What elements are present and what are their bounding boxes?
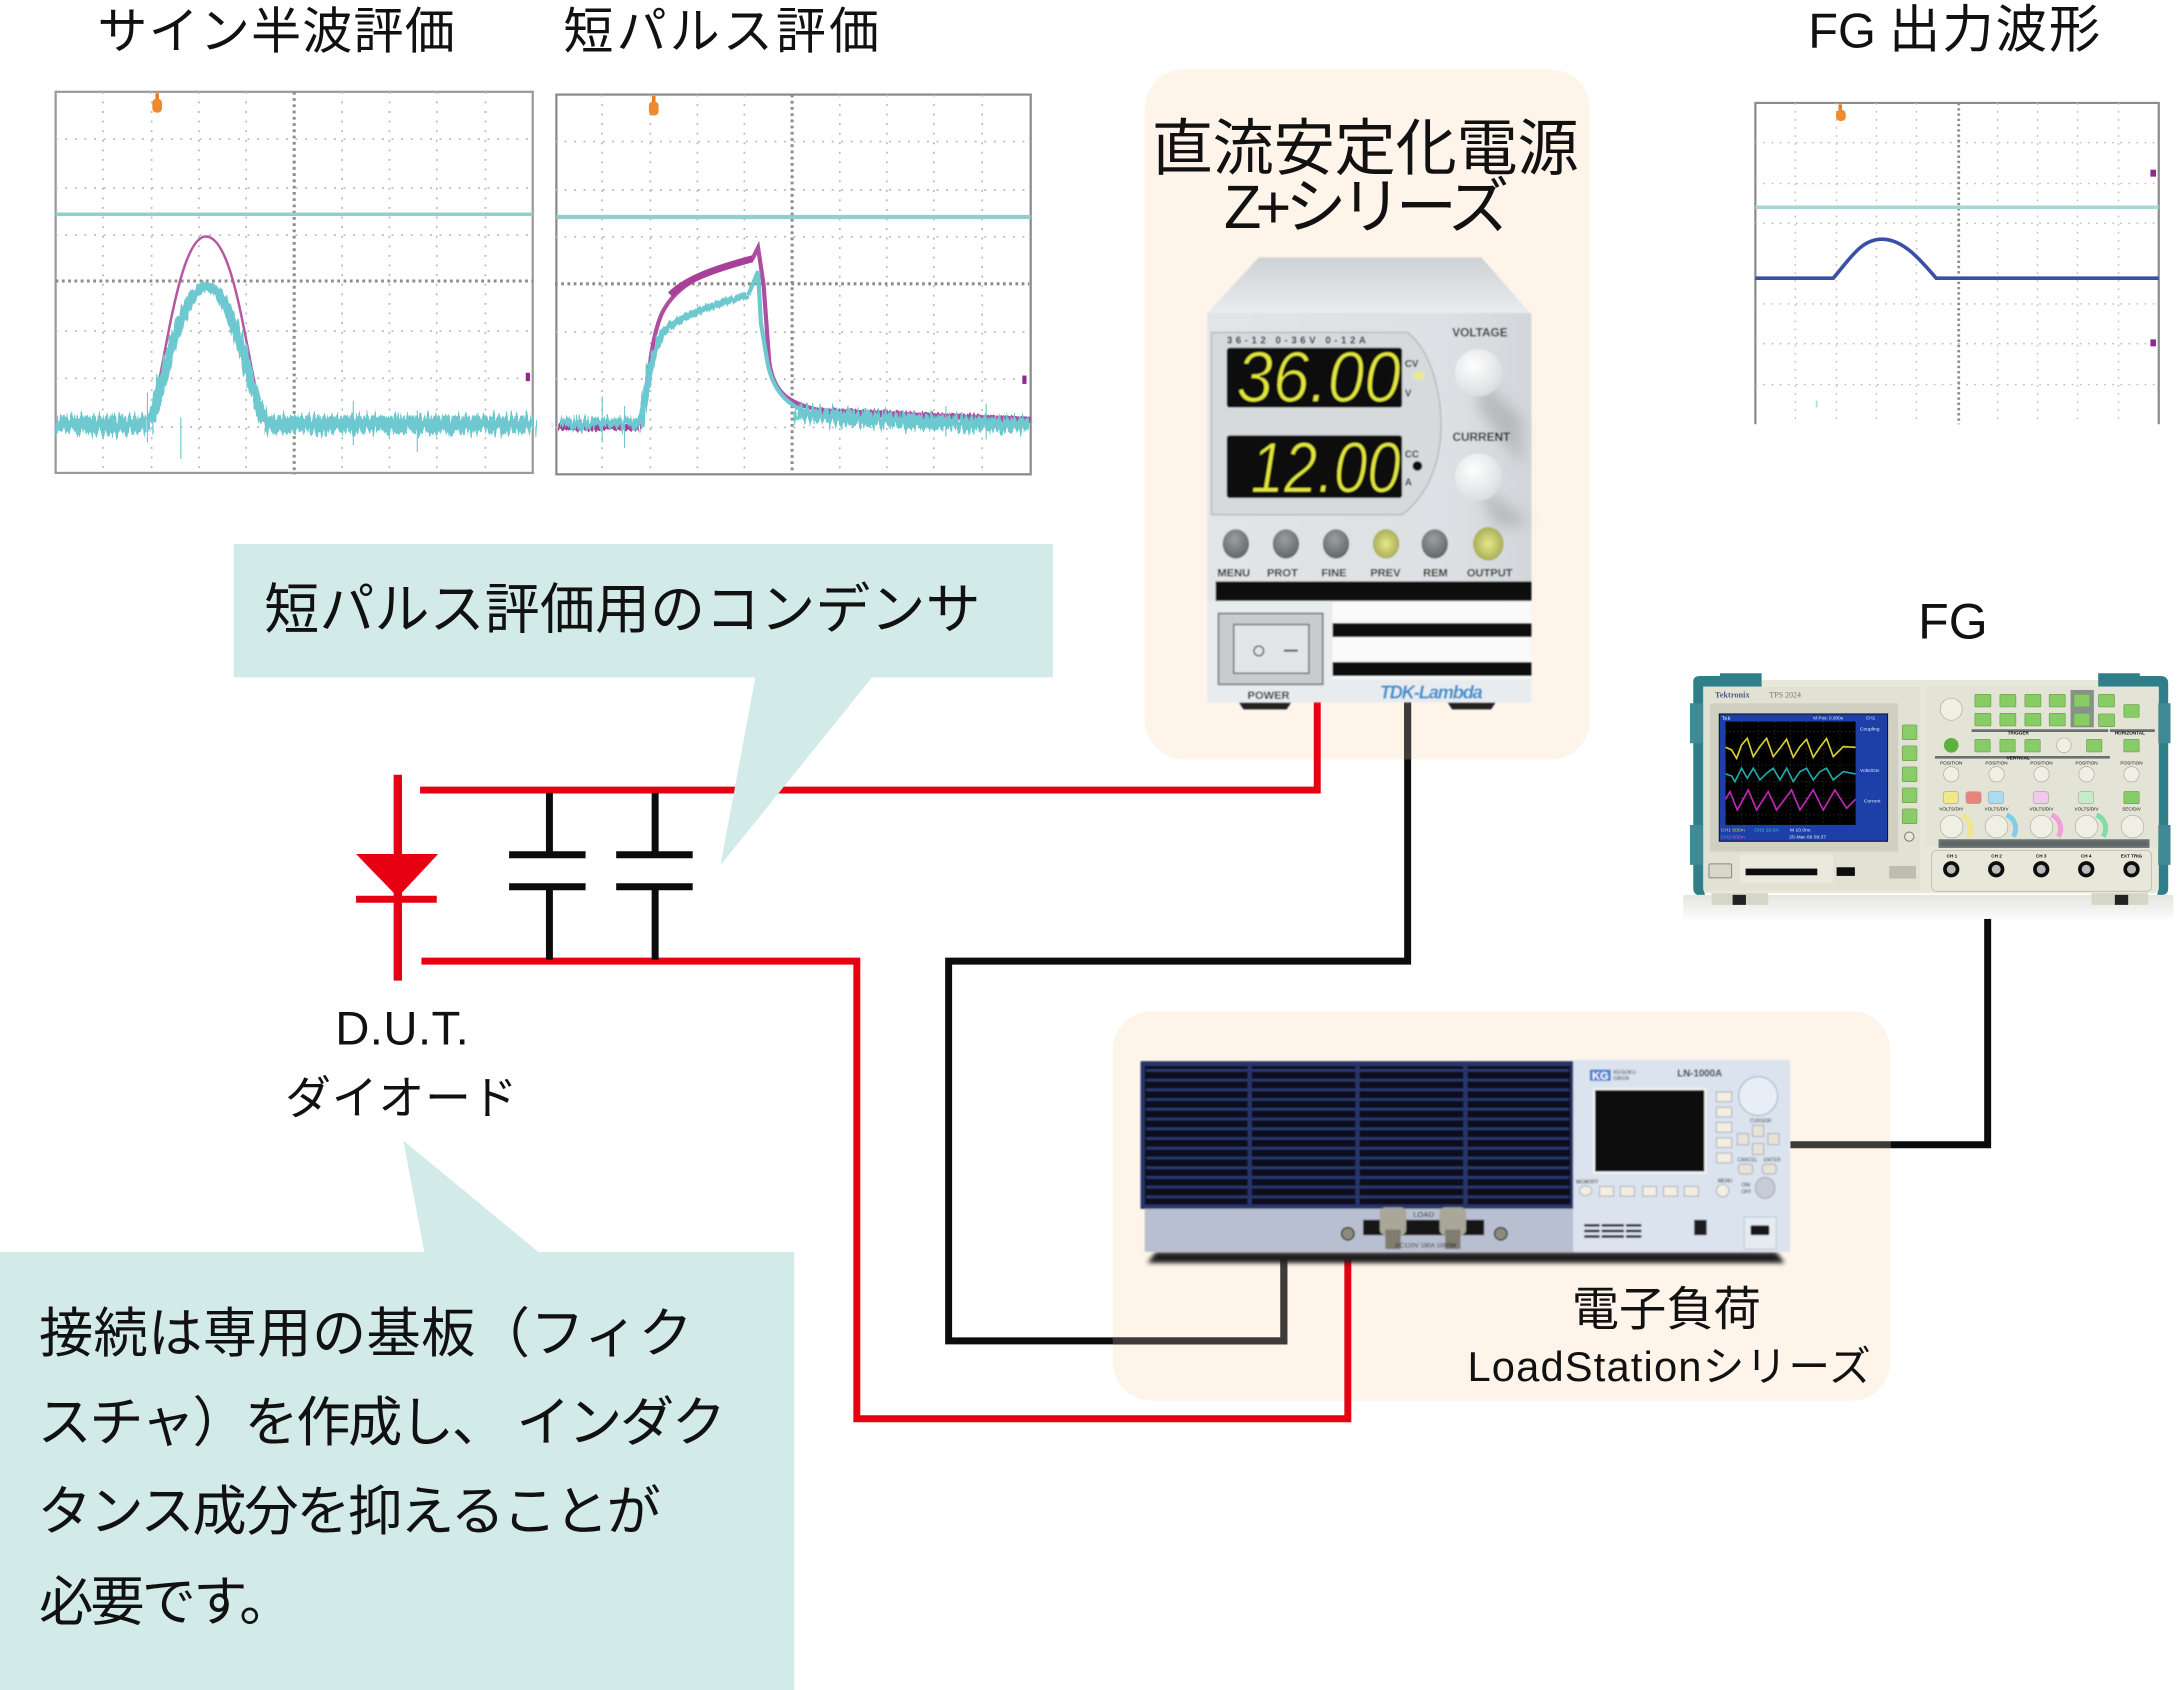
case (1697, 680, 2165, 893)
oscilloscope screen: M 10.0ns (1790, 827, 1811, 833)
front control panel (1573, 1060, 1790, 1252)
KG logo: KG (1592, 1070, 1609, 1082)
on off button (1755, 1177, 1775, 1198)
diagram: capacitor 2 (616, 793, 693, 960)
key labels: MENU (1718, 1178, 1733, 1184)
heading: FG output waveform: FG (1808, 4, 1876, 58)
diagram: capacitor 1 (509, 793, 586, 960)
POWER label: POWER (1248, 690, 1290, 702)
compact flash slot (1709, 855, 1916, 883)
position and volts labels: POSITION (2030, 761, 2053, 766)
heading: electronic load: 電子負荷 (1572, 1284, 1761, 1337)
position and volts labels: POSITION (2075, 761, 2098, 766)
label: diode: ダイオード (285, 1072, 517, 1124)
position and volts labels (1939, 761, 2143, 811)
menu check knob (1905, 832, 1914, 841)
help key group (2071, 690, 2094, 727)
button labels (1217, 568, 1513, 580)
power switch (1744, 1217, 1776, 1249)
power supply feet (1238, 701, 1497, 709)
vent stripes (1333, 602, 1531, 679)
connector labels: EXT TRIG (2121, 854, 2143, 859)
channel buttons (1943, 792, 2094, 804)
key labels (1576, 1118, 1781, 1195)
position and volts labels: POSITION (2120, 761, 2143, 766)
oscilloscope screen: CH1 500m (1721, 827, 1745, 833)
CV and CC indicators: V (1405, 388, 1412, 399)
panel: power supply background (1145, 70, 1590, 759)
voltage knob: VOLTAGE (1452, 326, 1508, 340)
KG logo: KEISOKU (1613, 1070, 1636, 1076)
device: DC power supply Z+ (1207, 257, 1531, 709)
section labels (2007, 730, 2145, 760)
power supply front face (1207, 313, 1531, 702)
section labels: HORIZONTAL (2115, 730, 2145, 735)
load terminals: LOAD (1413, 1210, 1434, 1219)
softkeys (1902, 725, 1917, 824)
key labels: OFF (1741, 1189, 1751, 1195)
oscilloscope screen: M Pos: 0.000s (1813, 715, 1844, 720)
brand: TPS 2024 (1769, 690, 1801, 699)
button labels: PREV (1370, 568, 1401, 580)
section bars (1935, 731, 2155, 847)
current display: 12.00 (1250, 428, 1401, 508)
callout: short pulse capacitor (234, 544, 1053, 865)
input panel (1932, 851, 2152, 891)
oscilloscope screen: CH3 500m (1721, 834, 1745, 840)
wire: black segments inside panels (1113, 700, 1408, 1341)
callout: fixture note (0, 1141, 794, 1690)
key labels: ENTER (1764, 1157, 1781, 1163)
CV and CC indicators (1405, 359, 1424, 488)
chart: FG output waveform oscilloscope trace (1755, 103, 2159, 424)
model name: LN-1000A (1677, 1069, 1722, 1080)
position and volts labels: POSITION (1985, 761, 2008, 766)
oscilloscope screen (1719, 714, 1888, 841)
wire: black segment from load to panel edge (1790, 1142, 1890, 1147)
CV and CC indicators: CV (1405, 359, 1419, 370)
heading: LoadStation series: LoadStationシリーズ (1467, 1343, 1871, 1390)
grille (1142, 1061, 1573, 1209)
screen surround (1710, 703, 1898, 852)
heading: sine half wave: サイン半波評価 (97, 4, 455, 60)
brand: Tektronix (1715, 690, 1750, 699)
lower face (1207, 601, 1531, 702)
oscilloscope screen: CH2 10.0A (1754, 827, 1779, 833)
heading: DC power supply title: 直流安定化電源 (1152, 115, 1579, 183)
position and volts labels: VOLTS/DIV (1985, 806, 2009, 811)
voltage knob (1452, 326, 1508, 396)
button labels: MENU (1217, 568, 1250, 580)
heading: Z+ series: Z+シリーズ (1224, 173, 1509, 241)
black slot (1216, 581, 1531, 601)
model label: 36-12 0-36V 0-12A (1227, 336, 1366, 347)
chart: short pulse oscilloscope trace (555, 95, 1031, 474)
BNC connectors (1945, 863, 2138, 876)
connector labels: CH 4 (2081, 854, 2092, 859)
current knob (1452, 430, 1511, 501)
load shadow and feet (1148, 1252, 1785, 1263)
right control panel (1925, 687, 2158, 847)
wire: red return line to electronic load (421, 961, 1348, 1419)
power supply top cover (1207, 257, 1530, 313)
button labels: OUTPUT (1467, 568, 1513, 580)
wire: black line from power supply to electronic load (949, 700, 1408, 1341)
key labels: CURSOR (1750, 1118, 1772, 1124)
main dial (1739, 1077, 1778, 1116)
KG logo (1590, 1070, 1636, 1082)
position and volts labels: VOLTS/DIV (1939, 806, 1964, 811)
knob shadows (1477, 376, 1524, 526)
key labels: ON/ (1741, 1182, 1751, 1188)
brand (1715, 690, 1801, 699)
teal bumpers (1693, 673, 2168, 895)
connector labels: CH 2 (1991, 854, 2002, 859)
channel colour arcs (1962, 815, 2106, 837)
position and volts labels: SEC/DIV (2122, 806, 2142, 811)
section labels: VERTICAL (2007, 755, 2030, 760)
oscilloscope screen: 25-Mar-06 09:37 (1789, 834, 1826, 840)
knobs (1940, 698, 2144, 838)
oscilloscope screen: Tek (1722, 716, 1731, 722)
position and volts labels: POSITION (1940, 761, 1962, 766)
power switch (1218, 613, 1323, 684)
callout: fixture note: 接続は専用の基板（フィク (39, 1304, 693, 1364)
connector labels: CH 1 (1947, 854, 1958, 859)
CV and CC indicators: A (1405, 477, 1412, 488)
load screen (1594, 1089, 1705, 1173)
print button (1944, 738, 1959, 753)
button labels: FINE (1321, 568, 1347, 580)
voltage display: 36.00 (1237, 338, 1401, 418)
menu buttons (1975, 694, 2139, 804)
diagram: D.U.T. diode symbol (356, 775, 438, 981)
oscilloscope screen: CH1 (1866, 715, 1876, 720)
oscilloscope screen: Coupling (1860, 727, 1880, 733)
oscilloscope screen: Current (1864, 799, 1881, 805)
current knob: CURRENT (1452, 430, 1511, 444)
position and volts labels: VOLTS/DIV (2030, 806, 2054, 811)
device: electronic load LN-1000A (1142, 1060, 1790, 1263)
wire: black line from FG to electronic load (1890, 915, 1988, 1145)
section labels: TRIGGER (2008, 730, 2029, 735)
heading: FG: FG (1918, 593, 1988, 649)
side keys (1716, 1092, 1732, 1163)
label: D.U.T.: D.U.T. (335, 1003, 469, 1056)
callout: fixture note: 必要です。 (39, 1572, 293, 1632)
callout: fixture note: タンス成分を抑えることが (38, 1482, 661, 1542)
panel: electronic load background (1113, 1011, 1890, 1401)
bottom plate (1145, 1209, 1573, 1252)
panel vents (1584, 1225, 1654, 1237)
button labels: PROT (1267, 568, 1298, 580)
lower keys (1579, 1184, 1729, 1197)
feet (1712, 892, 2148, 905)
front buttons (1223, 527, 1504, 561)
button labels: REM (1423, 568, 1448, 580)
callout: fixture note: スチャ）を作成し、 インダク (38, 1393, 726, 1453)
oscilloscope screen: Volts/Div (1860, 768, 1880, 774)
chart: sine half wave oscilloscope trace (56, 92, 533, 474)
load terminals (1342, 1207, 1507, 1250)
connector labels (1947, 854, 2143, 859)
load terminals: DC120V 180A 1000W (1395, 1243, 1456, 1250)
cursor keys (1737, 1125, 1779, 1174)
CV and CC indicators: CC (1405, 450, 1419, 461)
USB port (1694, 1220, 1707, 1235)
position and volts labels: VOLTS/DIV (2075, 806, 2099, 811)
connector labels: CH 3 (2036, 854, 2047, 859)
callout: short pulse capacitor: 短パルス評価用のコンデンサ (264, 579, 981, 641)
heading: FG output waveform: 出力波形 (1889, 0, 2100, 58)
heading: short pulse: 短パルス評価 (563, 4, 879, 60)
left bezel (1703, 687, 1920, 891)
floor reflection (1683, 895, 2173, 919)
key labels: MEMORY (1576, 1180, 1599, 1186)
device: function generator oscilloscope (1683, 673, 2173, 919)
wire: red positive line from power supply (420, 700, 1317, 790)
KG logo: GIKEN (1613, 1076, 1629, 1082)
TDK-Lambda logo: TDK-Lambda (1380, 682, 1483, 702)
display recess (1212, 332, 1441, 515)
key labels: CANCEL (1737, 1157, 1758, 1163)
